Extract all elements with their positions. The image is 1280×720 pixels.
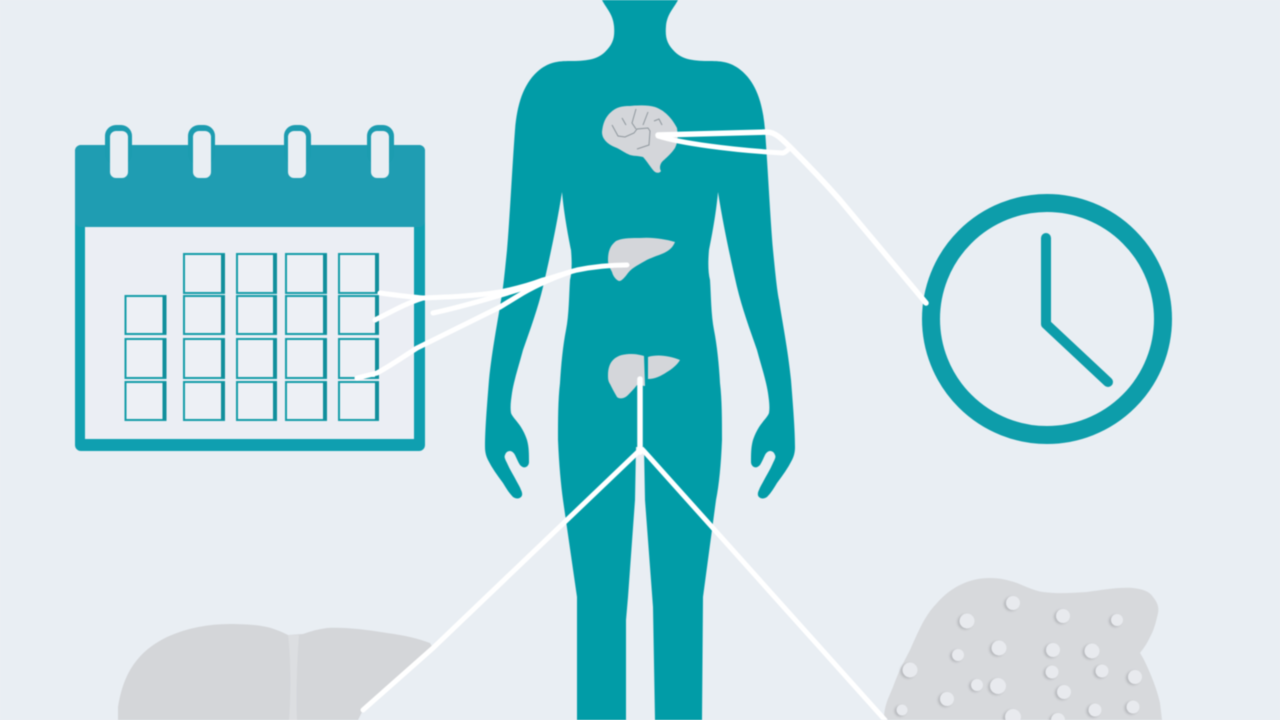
icon: fatty liver with nodules, bottom right xyxy=(884,578,1162,720)
human body silhouette xyxy=(485,0,795,720)
calendar body xyxy=(75,145,425,451)
connector: lower liver to bottom livers xyxy=(363,379,885,720)
icon: brain inside torso xyxy=(602,105,678,173)
icon: healthy liver, bottom left xyxy=(118,624,433,720)
icon: clock xyxy=(931,203,1163,435)
icon: calendar xyxy=(75,125,425,451)
calendar cell shading xyxy=(162,254,379,420)
calendar date grid xyxy=(126,254,378,420)
connector: liver to calendar xyxy=(357,265,627,378)
connector: brain to clock xyxy=(658,132,926,303)
calendar header xyxy=(75,145,425,227)
icon: lower liver inside torso xyxy=(608,354,680,398)
calendar page xyxy=(85,227,414,439)
calendar binder rings xyxy=(105,125,394,178)
icon: upper liver inside torso xyxy=(608,238,675,281)
